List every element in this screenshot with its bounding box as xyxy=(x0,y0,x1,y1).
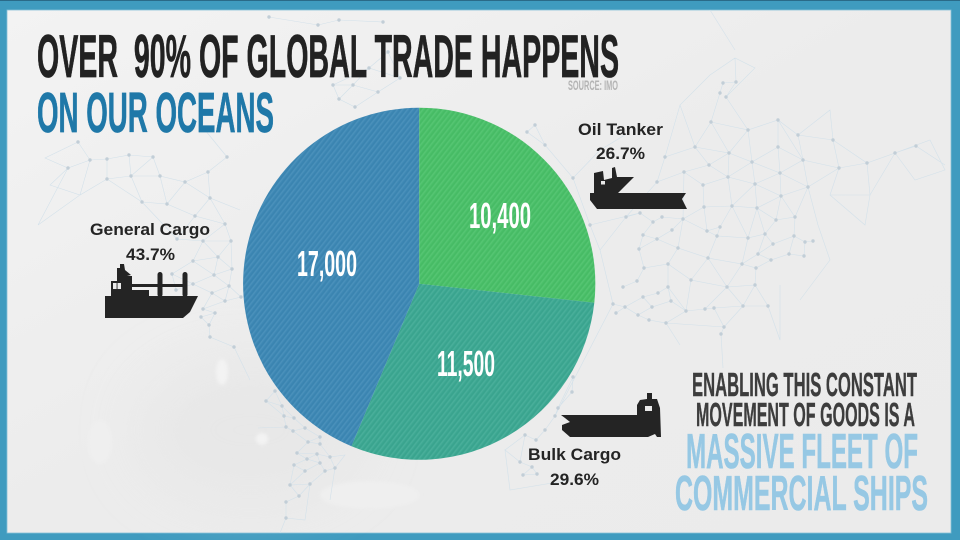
callout intro text xyxy=(692,366,917,433)
label: bulk cargo xyxy=(528,446,621,489)
label: oil tanker xyxy=(578,121,664,163)
pie chart xyxy=(243,108,595,460)
label: bulk cargo: Bulk Cargo xyxy=(528,446,621,464)
icon: general cargo ship xyxy=(105,264,198,318)
icon: oil tanker ship xyxy=(590,167,687,209)
label: bulk cargo: 29.6% xyxy=(550,471,599,489)
source note: SOURCE: IMO xyxy=(568,77,618,93)
label: oil tanker: Oil Tanker xyxy=(578,121,664,139)
icon: bulk cargo ship xyxy=(561,393,661,437)
label: general cargo xyxy=(90,220,210,264)
slice: general cargo xyxy=(243,108,419,446)
title xyxy=(37,23,619,145)
title: ON OUR OCEANS xyxy=(37,81,274,145)
value: 10,400: 10,400 xyxy=(469,195,531,236)
value: 11,500: 11,500 xyxy=(437,343,495,384)
label: general cargo: General Cargo xyxy=(90,220,210,239)
value: 17,000: 17,000 xyxy=(297,243,357,284)
slice: oil tanker xyxy=(419,108,595,303)
slice: bulk cargo xyxy=(352,284,594,460)
callout highlight text xyxy=(675,425,928,521)
label: oil tanker: 26.7% xyxy=(596,145,645,163)
label: general cargo: 43.7% xyxy=(126,245,175,264)
callout: massive fleet xyxy=(675,366,928,521)
